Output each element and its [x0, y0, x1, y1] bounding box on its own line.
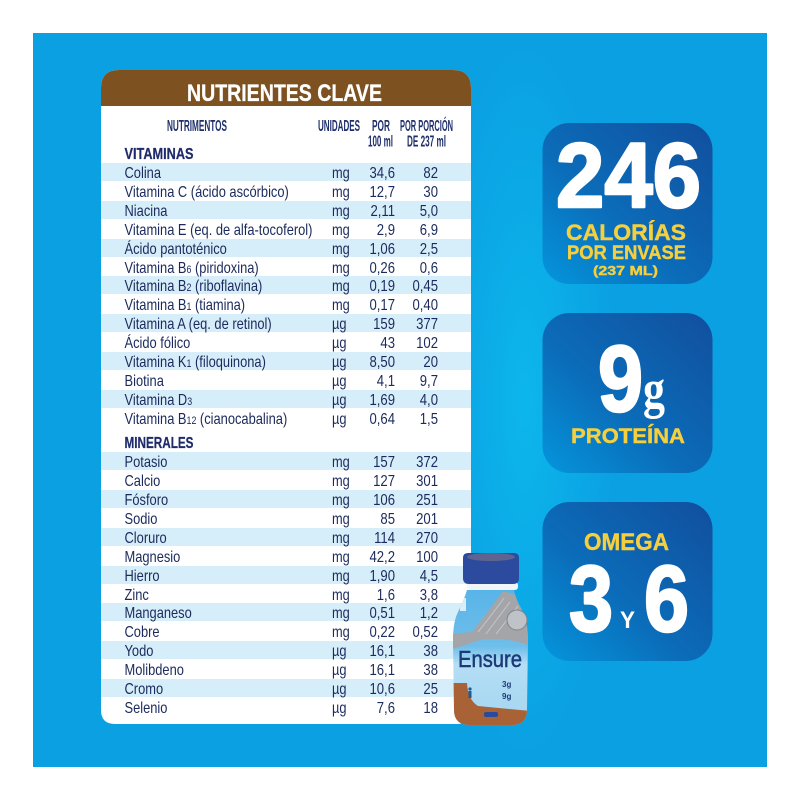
units column: mg: [332, 568, 350, 585]
values per 237 ml portion: [412, 165, 438, 717]
units column: mg: [332, 511, 350, 528]
nutrient names: Yodo: [124, 643, 153, 660]
big number 246: 246: [556, 125, 701, 227]
nutrient names: Fósforo: [124, 492, 168, 509]
units column: mg: [332, 203, 350, 220]
values per 237 ml portion: 82: [423, 165, 438, 182]
values per 100 ml: 8,50: [369, 354, 395, 371]
values per 100 ml: 127: [373, 473, 395, 490]
values per 237 ml portion: 270: [416, 530, 438, 547]
pack claims: 3g: [502, 680, 511, 689]
table card: [101, 70, 471, 724]
nutrient names: [124, 165, 312, 717]
bottle cap: [463, 553, 519, 584]
values per 237 ml portion: 38: [423, 643, 438, 660]
label por envase: POR ENVASE: [567, 243, 686, 264]
nutrient names: Vitamina B2 (riboflavina): [124, 278, 262, 295]
values per 100 ml: 42,2: [369, 549, 395, 566]
values per 100 ml: 1,69: [369, 392, 395, 409]
values per 100 ml: 0,51: [369, 605, 395, 622]
units column: mg: [332, 165, 350, 182]
values per 100 ml: 0,17: [369, 297, 395, 314]
label proteina: PROTEÍNA: [571, 425, 685, 448]
values per 237 ml portion: 4,0: [420, 392, 438, 409]
big number 9: 9: [598, 326, 643, 431]
values per 100 ml: 106: [373, 492, 395, 509]
values per 100 ml: 34,6: [369, 165, 395, 182]
small logo: [484, 712, 498, 717]
values per 237 ml portion: 9,7: [420, 373, 438, 390]
brand name: Ensure: [458, 646, 522, 672]
values per 100 ml: 43: [380, 335, 395, 352]
values per 237 ml portion: 372: [416, 454, 438, 471]
column headers: DE 237 ml: [407, 134, 446, 150]
units column: µg: [332, 681, 346, 698]
column headers: [167, 117, 453, 150]
values per 100 ml: 16,1: [369, 662, 395, 679]
nutrient names: Cloruro: [124, 530, 167, 547]
units column: mg: [332, 473, 350, 490]
nutrient names: Colina: [124, 165, 162, 182]
person icon: [468, 687, 472, 698]
nutrient names: Vitamina C (ácido ascórbico): [124, 184, 289, 201]
label calorias: CALORÍAS: [566, 220, 686, 245]
values per 100 ml: 1,6: [377, 587, 395, 604]
nutrient names: Molibdeno: [124, 662, 184, 679]
big number 3: 3: [569, 546, 613, 651]
seal: [507, 610, 527, 630]
values per 100 ml: 0,64: [369, 411, 395, 428]
units column: µg: [332, 643, 346, 660]
icon: Ensure bottle: [450, 553, 530, 730]
values per 237 ml portion: 3,8: [420, 587, 438, 604]
column headers: UNIDADES: [318, 118, 360, 135]
nutrient names: Sodio: [124, 511, 157, 528]
big number 6: 6: [644, 546, 689, 651]
units column: µg: [332, 392, 346, 409]
values per 100 ml: [369, 165, 395, 717]
nutrient names: Calcio: [124, 473, 160, 490]
nutrient names: Cobre: [124, 624, 160, 641]
values per 237 ml portion: 25: [423, 681, 438, 698]
units column: mg: [332, 549, 350, 566]
connector y: Y: [620, 607, 635, 634]
values per 237 ml portion: 377: [416, 316, 438, 333]
units column: µg: [332, 335, 346, 352]
units column: mg: [332, 184, 350, 201]
nutrient names: Ácido fólico: [124, 334, 190, 352]
units column: mg: [332, 278, 350, 295]
column headers: NUTRIMENTOS: [167, 118, 227, 135]
section heading: vitaminas: VITAMINAS: [124, 146, 194, 163]
values per 100 ml: 114: [374, 530, 395, 547]
chocolate band: [454, 683, 527, 725]
column headers: POR: [372, 118, 390, 135]
nutrient names: Niacina: [124, 203, 168, 220]
values per 237 ml portion: 0,40: [412, 297, 438, 314]
panel: 246 calorias: [542, 123, 712, 284]
values per 237 ml portion: 0,45: [412, 278, 438, 295]
units column: µg: [332, 662, 346, 679]
values per 237 ml portion: 18: [423, 700, 438, 717]
units column: mg: [332, 530, 350, 547]
units column: mg: [332, 241, 350, 258]
values per 237 ml portion: 5,0: [420, 203, 438, 220]
values per 237 ml portion: 102: [416, 335, 438, 352]
units column: µg: [332, 354, 346, 371]
values per 237 ml portion: 251: [416, 492, 438, 509]
units column: [332, 165, 350, 717]
units column: µg: [332, 700, 346, 717]
values per 237 ml portion: 1,2: [420, 605, 438, 622]
nutrient names: Potasio: [124, 454, 167, 471]
nutrient names: Vitamina B1 (tiamina): [124, 297, 245, 314]
units column: mg: [332, 587, 350, 604]
column headers: 100 ml: [368, 134, 393, 150]
units column: µg: [332, 373, 346, 390]
values per 237 ml portion: 301: [416, 473, 438, 490]
units column: mg: [332, 624, 350, 641]
panel: omega 3 y 6: [542, 502, 712, 661]
unit g: g: [643, 359, 665, 419]
nutrient names: Vitamina B6 (piridoxina): [124, 260, 259, 277]
values per 100 ml: 157: [373, 454, 395, 471]
label omega: OMEGA: [584, 529, 669, 556]
nutrient names: Vitamina B12 (cianocabalina): [124, 411, 287, 428]
units column: µg: [332, 411, 346, 428]
values per 100 ml: 16,1: [369, 643, 395, 660]
label 237 ml: (237 ML): [593, 263, 658, 278]
table heading bar: NUTRIENTES CLAVE: [187, 80, 382, 107]
panel: nutrient table: [101, 70, 471, 724]
values per 237 ml portion: 0,52: [412, 624, 438, 641]
values per 100 ml: 1,90: [369, 568, 395, 585]
nutrient names: Vitamina D3: [124, 392, 193, 409]
values per 100 ml: 10,6: [369, 681, 395, 698]
nutrient names: Magnesio: [124, 549, 180, 566]
values per 237 ml portion: 2,5: [420, 241, 438, 258]
values per 100 ml: 4,1: [377, 373, 395, 390]
values per 237 ml portion: 201: [416, 511, 438, 528]
values per 237 ml portion: 4,5: [420, 568, 438, 585]
values per 100 ml: 0,26: [369, 260, 395, 277]
values per 100 ml: 0,22: [369, 624, 395, 641]
pack claims: [502, 680, 511, 701]
nutrient names: Zinc: [124, 587, 149, 604]
silver swoosh: [450, 591, 530, 650]
white side mark: [460, 598, 466, 611]
units column: mg: [332, 222, 350, 239]
values per 237 ml portion: 0,6: [420, 260, 438, 277]
units column: mg: [332, 492, 350, 509]
nutrient names: Vitamina E (eq. de alfa-tocoferol): [124, 222, 312, 239]
nutrient names: Selenio: [124, 700, 167, 717]
units column: mg: [332, 297, 350, 314]
nutrient names: Manganeso: [124, 605, 192, 622]
units column: µg: [332, 316, 346, 333]
nutrient names: Hierro: [124, 568, 160, 585]
values per 237 ml portion: 100: [416, 549, 438, 566]
nutrient names: Ácido pantoténico: [124, 240, 227, 258]
values per 100 ml: 159: [373, 316, 395, 333]
units column: mg: [332, 454, 350, 471]
values per 237 ml portion: 1,5: [420, 411, 438, 428]
values per 100 ml: 1,06: [369, 241, 395, 258]
values per 237 ml portion: 20: [423, 354, 438, 371]
values per 100 ml: 12,7: [369, 184, 395, 201]
neck ring: [467, 582, 518, 590]
pack claims: 9g: [502, 692, 511, 701]
units column: mg: [332, 605, 350, 622]
units column: mg: [332, 260, 350, 277]
panel: nutrient table: POR PORCIÓN: [400, 117, 453, 135]
nutrient names: Cromo: [124, 681, 163, 698]
panel: 9 g proteina: [542, 313, 712, 473]
nutrient names: Vitamina A (eq. de retinol): [124, 316, 272, 333]
values per 100 ml: 7,6: [377, 700, 395, 717]
nutrient names: Vitamina K1 (filoquinona): [124, 354, 266, 371]
table stripes: [101, 163, 471, 697]
values per 237 ml portion: 6,9: [420, 222, 438, 239]
table heading bar: [101, 70, 471, 107]
section heading: minerales: MINERALES: [124, 435, 194, 452]
bottle body: [453, 590, 528, 725]
values per 100 ml: 2,9: [377, 222, 395, 239]
values per 100 ml: 2,11: [370, 203, 395, 220]
values per 100 ml: 85: [380, 511, 395, 528]
nutrient names: Biotina: [124, 373, 165, 390]
values per 237 ml portion: 38: [423, 662, 438, 679]
values per 100 ml: 0,19: [369, 278, 395, 295]
values per 237 ml portion: 30: [423, 184, 438, 201]
